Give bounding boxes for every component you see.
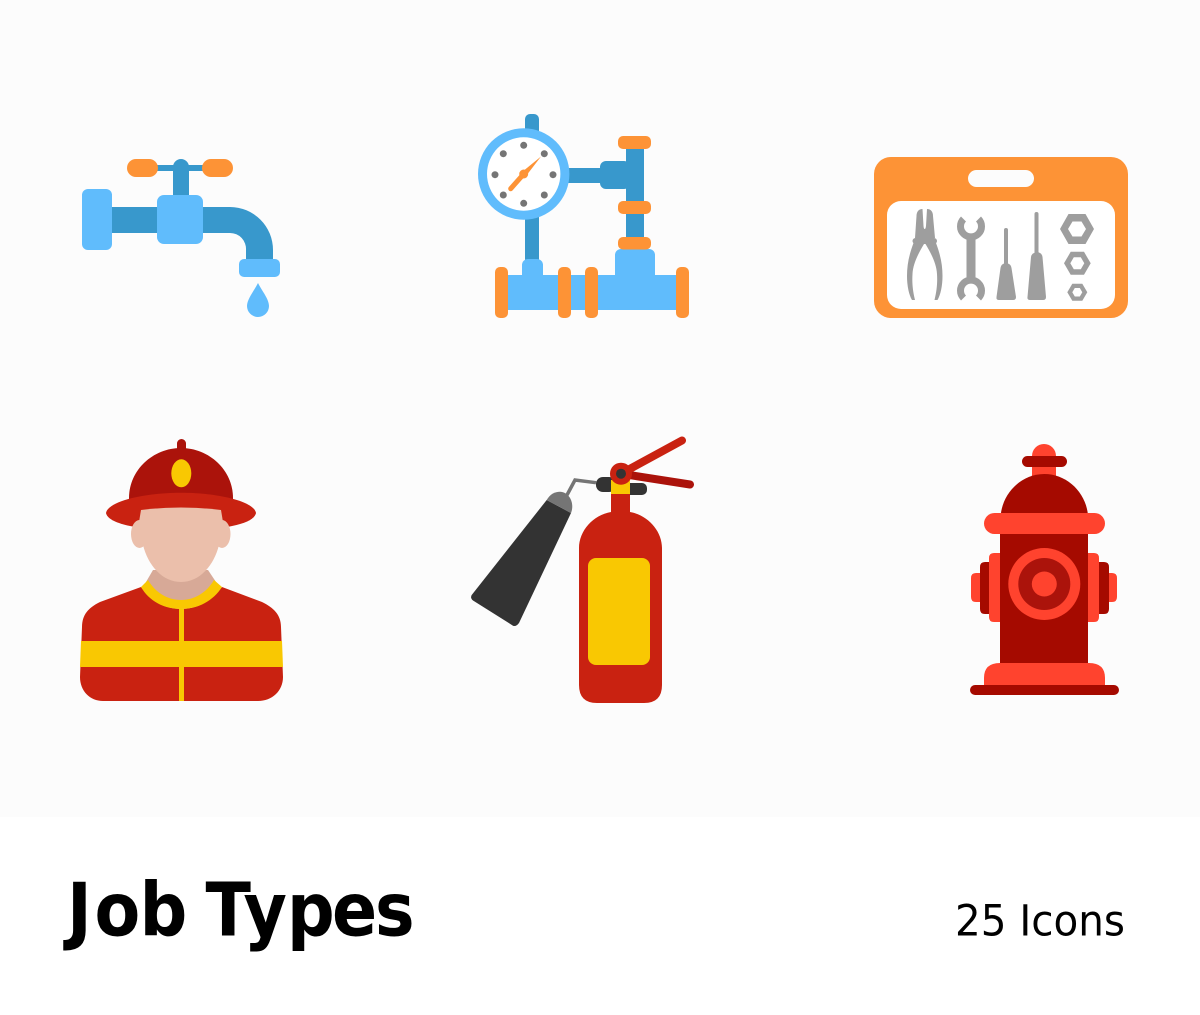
icon count: 25 Icons (955, 897, 1125, 947)
icon: fire hydrant (970, 444, 1119, 695)
icon: water faucet (82, 159, 280, 317)
hex nuts (1060, 214, 1094, 301)
screwdriver small (996, 228, 1016, 300)
wrench (961, 219, 982, 298)
chest stripe (80, 641, 283, 667)
icon: fire extinguisher (471, 440, 690, 703)
icon: pipes with pressure gauge (478, 114, 689, 318)
face (139, 508, 223, 582)
pliers (907, 209, 942, 300)
collar (141, 580, 222, 609)
ears (131, 520, 148, 548)
jacket (80, 587, 283, 701)
gauge dial (478, 128, 569, 220)
screwdriver large (1027, 212, 1046, 300)
neck (146, 570, 216, 604)
title: Job Types (63, 867, 415, 954)
icon: toolbox with tools (874, 157, 1128, 318)
icon: firefighter (80, 439, 283, 701)
